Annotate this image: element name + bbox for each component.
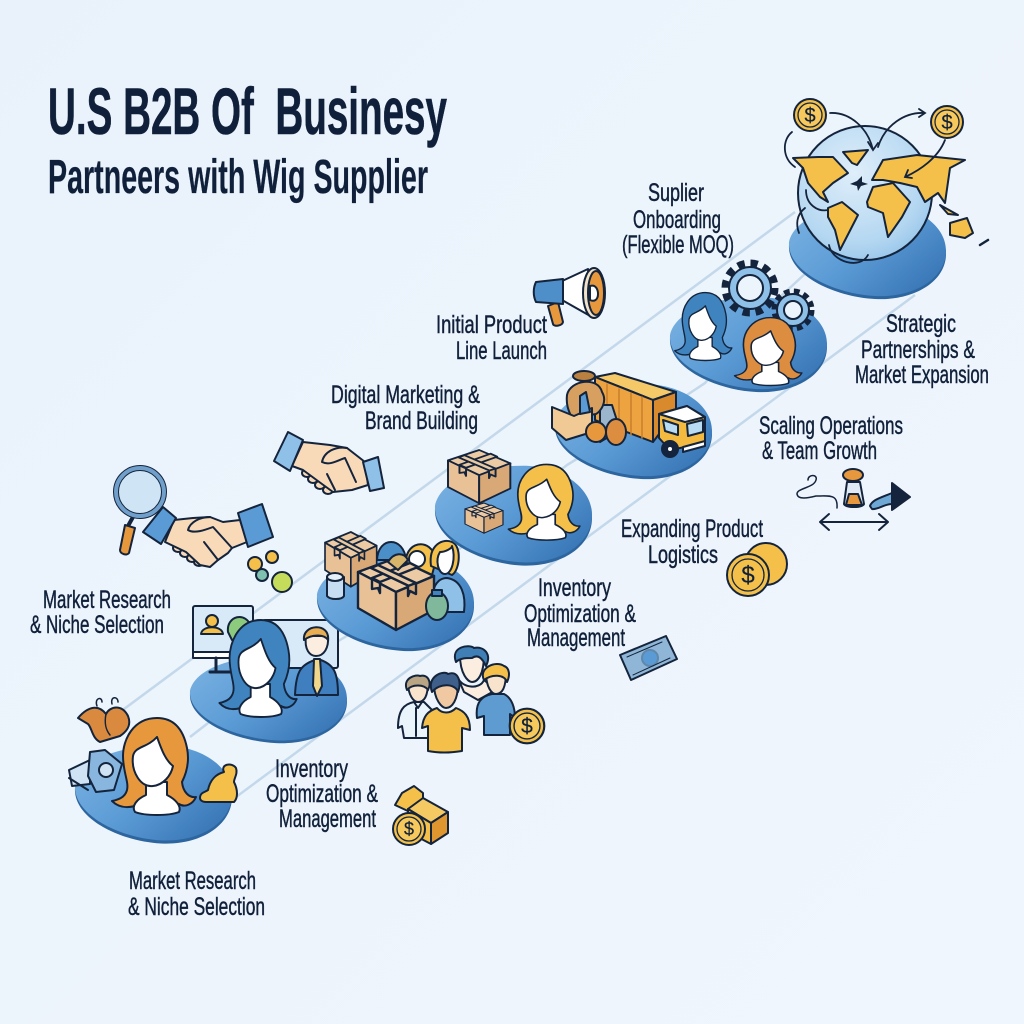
label: inventory optimization lower	[266, 755, 378, 833]
icon: blue wig mannequin	[675, 293, 732, 360]
icon: box with coin: $	[404, 819, 414, 839]
icon: coins: $	[741, 562, 755, 589]
label: supplier onboarding: Suplier	[648, 179, 704, 207]
icon: dollar coin	[510, 709, 544, 743]
label: scaling operations: & Team Growth	[762, 437, 877, 465]
step platform 4: boxes and blonde wig	[435, 450, 592, 566]
label: digital marketing: Digital Marketing &	[331, 381, 480, 409]
icon: group of people	[398, 646, 515, 752]
label: strategic partnerships: Partnerships &	[861, 336, 975, 364]
icon: handshake lower	[143, 504, 273, 567]
step platform 1: market research	[69, 698, 237, 844]
icon: magnifying glass	[116, 468, 164, 554]
label: market research upper: & Niche Selection	[30, 611, 164, 639]
label: strategic partnerships: Strategic	[886, 310, 956, 338]
label: supplier onboarding: (Flexible MOQ)	[622, 231, 734, 259]
icon: large gear	[726, 264, 774, 312]
icon: scaling process symbols	[797, 469, 910, 530]
icon: orange wig mannequin	[112, 718, 196, 815]
step platform 5: logistics truck	[552, 371, 712, 479]
label: expanding product logistics: Logistics	[648, 541, 718, 569]
step platform 2: marketing team	[190, 606, 347, 743]
icon: orange wig pieces	[78, 698, 129, 742]
icon: delivery truck	[595, 373, 705, 457]
icon: orange wig mannequin	[735, 318, 802, 386]
title	[48, 74, 447, 204]
icon: computer monitor	[193, 606, 253, 672]
icon: coins	[727, 543, 787, 596]
label: initial product line launch: Line Launch	[456, 337, 547, 365]
icon: business man	[295, 627, 338, 696]
icon: blue cash and wig stack	[69, 750, 122, 792]
label: initial product line launch	[436, 311, 547, 365]
icon: small box	[465, 503, 503, 533]
label: supplier onboarding: Onboarding	[633, 206, 721, 234]
icon: dollar coin right	[931, 106, 963, 138]
icon: blue wig mannequin	[219, 620, 297, 717]
icon: small yellow item	[388, 554, 408, 570]
label: market research upper: Market Research	[43, 586, 171, 614]
icon: green lantern	[426, 590, 448, 620]
icon: dollar coin: $	[521, 715, 533, 738]
label: inventory optimization upper: Inventory	[538, 574, 611, 602]
icon: dollar coin left: $	[804, 105, 816, 127]
icon: tape roll	[327, 573, 344, 599]
label: scaling operations: Scaling Operations	[759, 412, 903, 440]
label: strategic partnerships	[855, 310, 989, 389]
icon: dollar coin left	[794, 99, 826, 131]
label: market research upper	[30, 586, 171, 639]
step platform 7: global expansion	[785, 99, 988, 299]
label: expanding product logistics: Expanding Product	[621, 515, 763, 543]
label: scaling operations	[759, 412, 903, 465]
icon: banknote	[620, 636, 677, 680]
icon: workers with boxes	[552, 371, 626, 445]
label: inventory optimization upper: Management	[527, 624, 625, 652]
icon: second screen	[263, 620, 338, 668]
icon: globe	[785, 109, 988, 263]
label: inventory optimization lower: Inventory	[275, 755, 348, 783]
step platform 6: team wigs and gears	[670, 264, 827, 392]
icon: blonde wig mannequin	[508, 464, 580, 540]
label: market research lower: & Niche Selection	[128, 893, 265, 921]
icon: team figures	[377, 541, 464, 612]
label: supplier onboarding	[622, 179, 734, 259]
icon: large box	[358, 558, 434, 630]
label: inventory optimization upper: Optimization &	[524, 600, 636, 628]
icon: small gear	[775, 292, 811, 328]
title: Partneers with Wig Supplier	[48, 151, 428, 204]
icon: dollar coin right: $	[941, 112, 953, 134]
label: inventory optimization lower: Optimization &	[266, 780, 378, 808]
label: inventory optimization upper	[524, 574, 636, 652]
icon: handshake upper	[274, 432, 384, 494]
label: digital marketing	[331, 381, 480, 435]
icon: box with coin	[393, 786, 448, 845]
icon: small box	[325, 532, 377, 587]
icon: large box	[448, 450, 510, 503]
title: U.S B2B Of Businesy	[48, 74, 447, 148]
icon: megaphone	[534, 268, 605, 326]
label: expanding product logistics	[621, 515, 763, 569]
label: market research lower: Market Research	[129, 867, 256, 895]
icon: decorative gears cluster	[248, 551, 292, 592]
icon: yellow figurine	[200, 765, 237, 802]
step platform 3: boxes and team	[317, 532, 474, 651]
label: initial product line launch: Initial Product	[436, 311, 547, 339]
label: digital marketing: Brand Building	[365, 407, 478, 435]
label: market research lower	[128, 867, 265, 921]
label: inventory optimization lower: Management	[279, 805, 376, 833]
